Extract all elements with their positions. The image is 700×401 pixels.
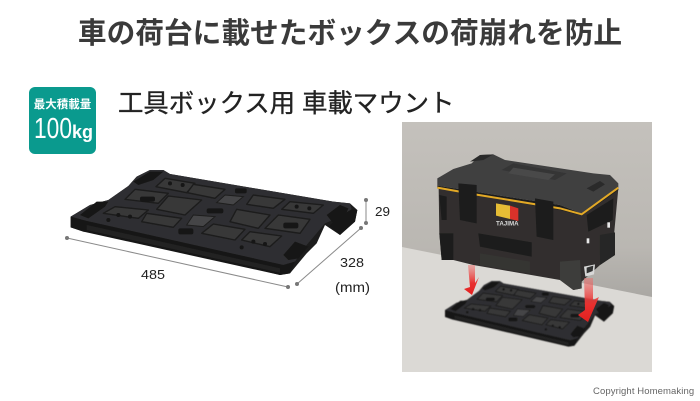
copyright: Copyright Homemaking xyxy=(593,386,694,397)
arrow: left xyxy=(464,265,479,295)
front handle xyxy=(478,233,532,257)
mount plate xyxy=(71,170,357,275)
storage box xyxy=(437,154,618,290)
mount plate on floor xyxy=(445,281,614,347)
arrow: right xyxy=(578,278,599,322)
badge label: 最大積載量 xyxy=(34,99,91,111)
diagram: mount plate with dimensions xyxy=(65,170,390,295)
badge value: 100 xyxy=(34,113,72,145)
title: 車の荷台に載せたボックスの荷崩れを防止 xyxy=(78,18,622,50)
badge value: kg xyxy=(72,122,93,142)
logo: TAJIMA xyxy=(496,221,519,228)
product heading: 工具ボックス用 車載マウント xyxy=(118,90,454,118)
dimension: height 29: 29 xyxy=(375,204,390,219)
logo xyxy=(496,203,519,228)
latches xyxy=(439,183,553,260)
side panel xyxy=(587,198,613,232)
floor xyxy=(402,247,652,372)
badge: max load 100kg xyxy=(29,87,96,154)
dimension: depth 328: 328 xyxy=(340,255,364,270)
dimension: height 29 xyxy=(364,198,390,225)
dimension: width 485: 485 xyxy=(141,267,165,282)
wall xyxy=(402,122,652,372)
dimension: width 485 xyxy=(65,236,290,289)
unit label: (mm) xyxy=(335,280,370,295)
photo: box above mount xyxy=(402,122,652,372)
dimension: depth 328 xyxy=(295,226,364,286)
